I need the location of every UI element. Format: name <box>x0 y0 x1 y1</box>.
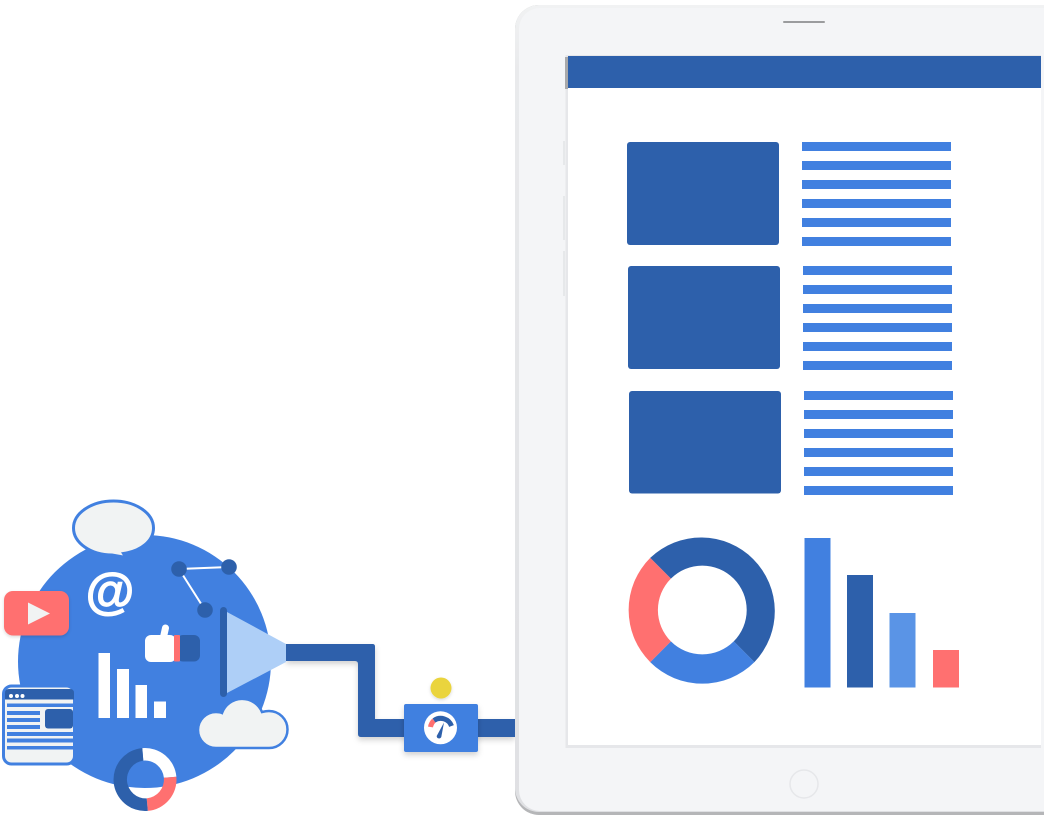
screen frame <box>566 55 1041 748</box>
side buttons <box>563 141 565 296</box>
gauge box <box>404 704 478 752</box>
hub of data sources <box>4 501 288 811</box>
small donut chart <box>114 748 177 811</box>
tablet device <box>515 5 1049 815</box>
home button <box>790 770 818 798</box>
network icon <box>171 559 237 618</box>
white bar chart <box>98 653 166 718</box>
bar chart <box>804 538 959 688</box>
gauge dial <box>424 711 457 744</box>
thumbs up icon <box>145 628 200 662</box>
speech bubble <box>74 501 154 558</box>
status light: yellow dot <box>430 678 452 698</box>
donut chart <box>629 537 775 684</box>
browser window <box>4 686 74 764</box>
tablet casing <box>515 5 1049 815</box>
screen header bar <box>565 56 1041 89</box>
content row 1 <box>627 142 951 246</box>
blue circle <box>18 535 271 788</box>
video play icon <box>4 591 69 636</box>
cloud <box>198 699 288 748</box>
screen <box>568 88 1041 745</box>
gauge unit <box>404 704 478 752</box>
at sign: @ <box>86 563 134 619</box>
funnel <box>220 607 286 697</box>
content row 2 <box>628 266 952 370</box>
content row 3 <box>629 391 953 495</box>
speaker slot <box>783 21 825 23</box>
connector pipe: funnel to gauge to tablet <box>286 644 515 737</box>
